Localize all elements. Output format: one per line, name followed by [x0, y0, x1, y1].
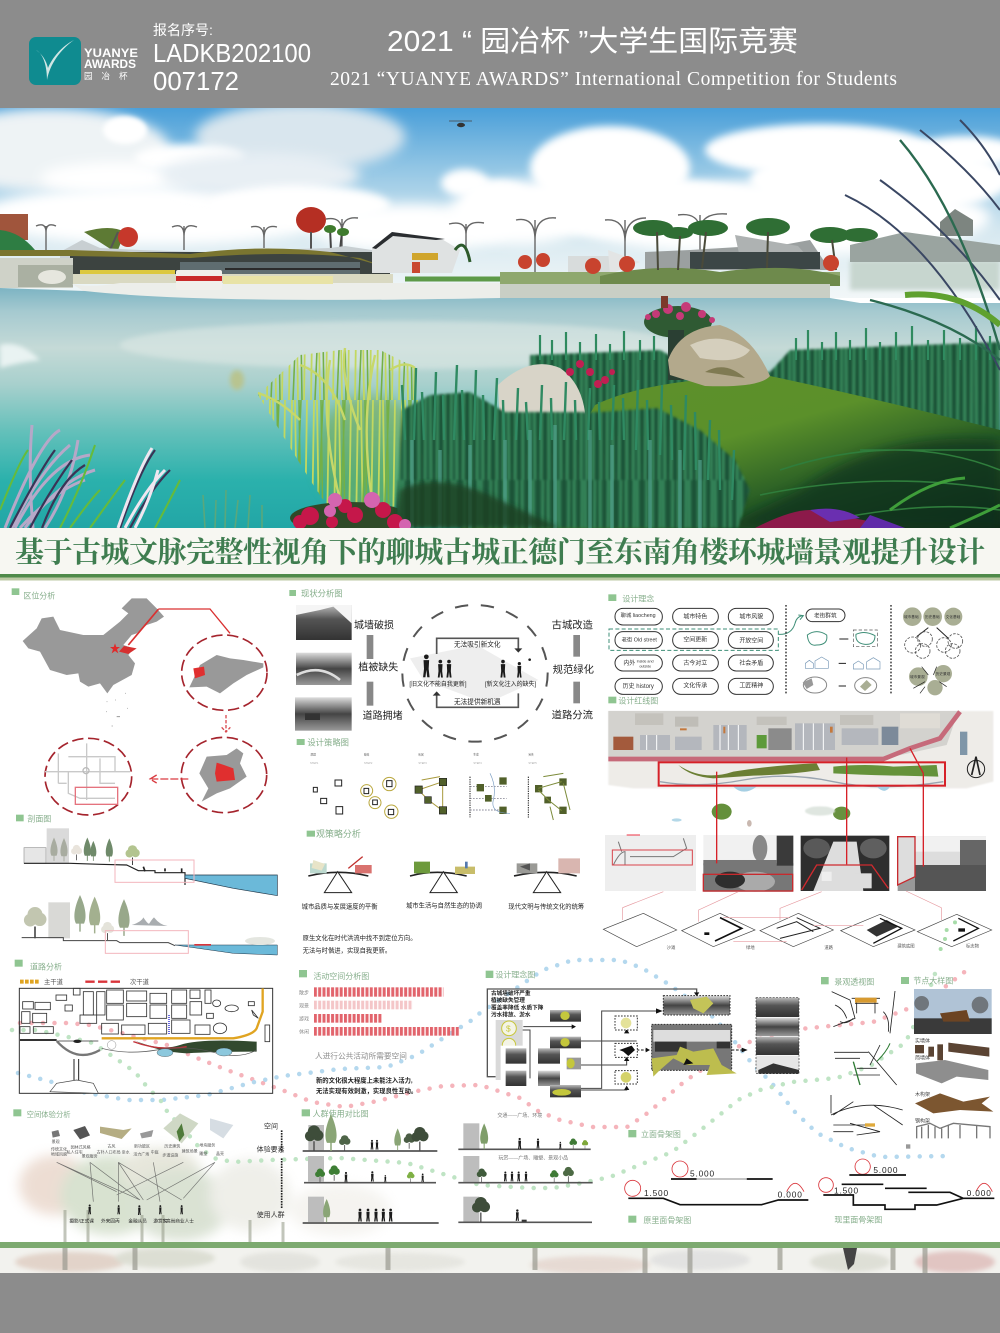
- heading: 景观透视图: [821, 976, 874, 986]
- site photos: [703, 835, 986, 892]
- heading: 空间体验分析: 空间体验分析: [27, 1110, 71, 1119]
- space experience network: 景观服务: [82, 1152, 98, 1158]
- logo: Yuanye Awards: [29, 37, 138, 85]
- space experience network: 游赏家: [153, 1218, 168, 1225]
- strategy steps: 生成: [473, 753, 479, 757]
- space experience network: 活力广场: [133, 1151, 149, 1157]
- dashed circle diagram: [402, 605, 548, 742]
- dotted dividers: [786, 605, 891, 695]
- layer captions: 沙滩: [667, 944, 676, 951]
- pill labels: 空间更新: [683, 636, 707, 644]
- strategy steps: 完善: [528, 753, 534, 757]
- concept pills: [615, 608, 773, 694]
- crowd comparison right column: [458, 1112, 593, 1222]
- left problem chain: 道路拥堵: [363, 709, 403, 722]
- design concept flow: 污水排放、淤水: [491, 1011, 531, 1019]
- heading: 原里面骨架图: 原里面骨架图: [643, 1216, 691, 1225]
- back reed band: [530, 342, 1000, 528]
- brick building and tree at left: [0, 214, 35, 252]
- space experience network: 景观: [52, 1138, 60, 1144]
- detail images: 木构架: [915, 1091, 930, 1098]
- space experience network: 园林式风格: [71, 1143, 91, 1149]
- footer band: [0, 1273, 1000, 1333]
- dashed circle diagram: [新文化注入的缺失]: [485, 680, 537, 688]
- back reed blades: [540, 326, 990, 360]
- helicopter: [449, 121, 472, 127]
- title band: 基于古城文脉完整性视角下的聊城古城正德门至东南角楼环城墙景观提升设计: [15, 535, 985, 569]
- layer captions: 道路: [824, 944, 834, 951]
- dotted blue path: [18, 960, 950, 1157]
- watermark tree trunks: [65, 1210, 283, 1242]
- pill labels: 城市风貌: [739, 613, 763, 621]
- competition title: 2021 “ 园冶杯 ”大学生国际竞赛: [387, 25, 798, 58]
- dotted green path: [12, 968, 937, 1188]
- left foreground grasses: [0, 425, 180, 528]
- isometric layers: [603, 913, 992, 947]
- space experience network: 步道设施: [162, 1152, 178, 1158]
- detail images: 钢构架: [915, 1118, 930, 1125]
- perspective sketches: [831, 991, 903, 1135]
- balance diagrams: 城市生活与自然生态的协调: [406, 900, 482, 909]
- activity bars: 游戏: [299, 1015, 309, 1022]
- purple flowers bottom right: [755, 509, 905, 528]
- balance diagrams: [302, 857, 584, 911]
- clouds: [0, 103, 1000, 256]
- trees behind the pavilion: [84, 207, 349, 250]
- design concept flow: 植被缺失管理: [491, 996, 525, 1004]
- heading: 设计理念: [608, 593, 654, 603]
- design concept flow: 覆盖率降低 水质下降: [491, 1003, 544, 1011]
- far left flowers bed base: [290, 502, 410, 534]
- space-element hierarchy labels: 空间: [264, 1121, 278, 1130]
- strategy steps: STEP3: [418, 761, 427, 765]
- road legend: 主干道: [44, 977, 64, 986]
- space experience network: 古风: [107, 1143, 115, 1149]
- strategy steps: STEP5: [528, 761, 537, 765]
- site photos: [295, 605, 352, 731]
- caption text: [303, 933, 417, 954]
- pink connector lines: [623, 891, 941, 942]
- pill labels: 开放空间: [739, 636, 763, 644]
- logo: Yuanye Awards: YUANYE: [84, 48, 138, 60]
- space experience network: 外来园丙: [101, 1218, 120, 1225]
- pill labels: Inside and: [637, 659, 654, 663]
- heading: 节点大样图: [901, 976, 953, 986]
- space experience network: 摄影/正式课: [69, 1218, 94, 1225]
- space experience network: 建筑场景: [182, 1147, 198, 1153]
- crowd comparison right column: 交通——广场、环境: [497, 1112, 542, 1119]
- panel: concept diagram, perspectives, skeleton sections: [458, 970, 994, 1225]
- heading: 节点大样图: 节点大样图: [913, 976, 953, 986]
- panel: location analysis: [12, 588, 277, 955]
- circle: Liaocheng: [181, 737, 267, 813]
- sky: [0, 108, 1000, 298]
- heading: 设计理念图: 设计理念图: [495, 970, 535, 980]
- space experience network: [51, 1113, 233, 1225]
- dotted pink path: [20, 970, 967, 1127]
- heading: 立面骨架图: [628, 1129, 681, 1139]
- space experience network: 亲水: [122, 1148, 130, 1154]
- road legend: 次干道: [130, 977, 150, 986]
- white house black roof: [372, 232, 470, 273]
- pill labels: 古今对立: [683, 659, 707, 667]
- palm trees and grey hall: [500, 209, 1000, 298]
- isometric layer contents: [704, 918, 978, 951]
- venn diagrams on right: 历史基础: [925, 614, 940, 619]
- pampas blades at right: [760, 120, 1000, 528]
- pill labels: [621, 611, 763, 690]
- strategy steps: [310, 753, 570, 820]
- pill labels: 内外: [623, 659, 635, 667]
- activity bars: 观景: [299, 1003, 309, 1009]
- strategy steps: STEP4: [473, 761, 482, 765]
- street lamps: [36, 214, 727, 275]
- competition title: 2021 “YUANYE AWARDS” International Competition for Students: [330, 69, 897, 90]
- space experience network: 新功能区: [134, 1142, 150, 1148]
- activity bars: [299, 987, 460, 1036]
- crowd comparison right column: 玩赏——广场、雕塑、景观小品: [498, 1155, 568, 1162]
- layer captions: 标志物: [966, 943, 980, 950]
- space experience network: 高尚商业人士: [166, 1218, 194, 1225]
- pill labels: 聊城 liaocheng: [621, 611, 656, 619]
- south china sea islands: [106, 693, 128, 726]
- circle: Shandong: [182, 635, 267, 710]
- dashed circle diagram: [旧文化不能自我更新]: [409, 680, 467, 688]
- pill labels: 社会矛盾: [739, 659, 763, 667]
- registration number: 007172: [153, 66, 239, 96]
- caption text: 无法与时偕进，实现自我更新。: [303, 945, 391, 954]
- original section skeleton: 1.500: [644, 1188, 669, 1198]
- left embankment wall: [0, 258, 73, 288]
- heading: 道路分析: 道路分析: [30, 962, 62, 972]
- arrow down: [222, 715, 230, 732]
- logo: Yuanye Awards: AWARDS: [84, 59, 136, 71]
- registration number: [153, 22, 311, 96]
- heading: 区位分析: [12, 588, 55, 600]
- space experience network: 历史建筑: [164, 1143, 180, 1149]
- layer captions: [667, 943, 980, 951]
- heading: 区位分析: 区位分析: [23, 590, 55, 600]
- dark reed base at left: [395, 482, 560, 528]
- islands: [672, 804, 850, 827]
- strategy steps: 破碎: [364, 753, 370, 757]
- crowd comparison left column: [303, 1114, 439, 1223]
- hero rendering: lakeside landscape: [0, 103, 1000, 534]
- balance diagrams: 现代文明与传统文化的统筹: [508, 902, 584, 911]
- venn diagrams on right: 历史景观: [936, 671, 951, 676]
- current section skeleton: 0.000: [967, 1188, 992, 1198]
- layer captions: 绿地: [746, 944, 755, 950]
- original section skeleton: 5.000: [690, 1168, 715, 1178]
- header band: [0, 0, 1000, 108]
- flowers bottom centre: [293, 492, 411, 531]
- activity bars: 散步: [299, 989, 309, 996]
- panel: design concept and red-line plan: [603, 593, 993, 951]
- space experience network: 金融从员: [128, 1218, 147, 1225]
- old street pill and process diagrams: [803, 609, 880, 694]
- road legend: [20, 977, 150, 986]
- dashed circle diagram: 无法提供新机遇: [454, 697, 501, 706]
- green roof pavilion: [0, 248, 397, 284]
- space experience network: 地域风貌: [51, 1151, 67, 1157]
- boulder main: [668, 325, 770, 386]
- design concept flow: 古城墙破坏严重: [491, 989, 531, 997]
- space experience network: 私人住宅: [67, 1148, 83, 1154]
- heading: 人群使用对比图: 人群使用对比图: [313, 1108, 369, 1118]
- small reeds in water: [203, 490, 262, 528]
- right strategy chain: [552, 619, 594, 722]
- foreground reeds: [395, 392, 750, 528]
- old street pill and process diagrams: 老街群筑: [814, 612, 837, 620]
- road plan: [19, 988, 273, 1093]
- pink flowers by boulder: [566, 360, 615, 388]
- space experience network: 地块服务: [199, 1142, 215, 1148]
- space-element hierarchy labels: 体验要素: [257, 1145, 285, 1154]
- pill labels: 老街 Old street: [622, 636, 657, 644]
- space-element hierarchy labels: [257, 1121, 285, 1219]
- watermark trees bottom-left: [19, 1148, 390, 1241]
- space experience network: 中庭: [151, 1148, 159, 1154]
- venn diagrams on right: 城市景观: [910, 674, 925, 679]
- title band: [0, 528, 1000, 580]
- activity bars: 休闲: [299, 1028, 309, 1035]
- current section skeleton: 5.000: [873, 1165, 898, 1175]
- venn diagrams on right: 文化基础: [946, 614, 961, 619]
- pill labels: 工匠精神: [739, 681, 763, 689]
- map of China: [23, 598, 164, 693]
- detail images: 简墙体: [915, 1054, 930, 1061]
- heading: 观策略分析: 观策略分析: [316, 828, 361, 839]
- original section skeleton: 0.000: [778, 1190, 803, 1200]
- panel: current-state analysis: [289, 589, 594, 954]
- foreground reed blades breaking the top edge: [402, 365, 734, 528]
- panel: road analysis, space experience, crowd use: [13, 960, 460, 1225]
- venn diagrams on right: 城市基础: [904, 614, 919, 619]
- balance diagrams: 城市品质与发展速度的平衡: [302, 901, 378, 910]
- dashed circle diagram: 无法吸引新文化: [454, 640, 501, 649]
- right strategy chain: 古城改造: [552, 619, 594, 632]
- space experience network: 传统文化: [51, 1146, 67, 1152]
- master plan strip: [608, 711, 993, 792]
- strategy steps: 肌理: [311, 753, 316, 757]
- space-element hierarchy labels: 使用人群: [257, 1210, 285, 1219]
- activity caption: 新的文化很大程度上未能注入活力,: [316, 1075, 413, 1084]
- competition title: [330, 25, 897, 90]
- ground band and tree reflection strip: [0, 1242, 1000, 1274]
- strategy steps: STEP2: [364, 761, 373, 765]
- caption: 现里面骨架图: 现里面骨架图: [834, 1215, 882, 1224]
- circle: old city: [45, 738, 132, 815]
- arrow left: [150, 775, 188, 783]
- yellow-green reeds: [258, 348, 425, 515]
- small locator map: [605, 835, 696, 891]
- grass hill: [460, 376, 1000, 528]
- logo: Yuanye Awards: 园冶杯: [84, 71, 137, 81]
- design concept flow: $: [506, 1023, 511, 1033]
- star and province highlight: [110, 609, 230, 654]
- heading: 现状分析图: 现状分析图: [301, 589, 343, 599]
- left problem chain: [354, 618, 403, 722]
- layer captions: 建筑底图: [897, 943, 915, 950]
- heading: 立面骨架图: 立面骨架图: [641, 1129, 681, 1139]
- heading: 设计红线图: 设计红线图: [618, 696, 658, 706]
- caption text: 原生文化在时代洪流中找不到定位方向。: [303, 933, 417, 942]
- red leader lines: [717, 748, 923, 867]
- left problem chain: 植被缺失: [358, 661, 398, 674]
- heading: 设计策略图: 设计策略图: [307, 738, 349, 748]
- detail images: [906, 989, 993, 1149]
- right strategy chain: 道路分流: [552, 709, 593, 722]
- detail images: 实墙体: [915, 1037, 930, 1044]
- activity caption: 无法实现有效刺激，实现良性互动。: [316, 1086, 417, 1095]
- strategy steps: STEP1: [310, 761, 319, 765]
- registration number: 报名序号:: [153, 22, 213, 38]
- space experience network: 雕塑: [199, 1150, 207, 1156]
- promenade and bus: [72, 270, 830, 300]
- heading: 设计理念: 设计理念: [622, 593, 654, 603]
- right strategy chain: 规范绿化: [553, 663, 594, 676]
- current section skeleton: [819, 1159, 994, 1209]
- pill labels: 城市特色: [683, 613, 707, 621]
- pill labels: outside: [639, 665, 651, 669]
- heading: 剖面图: 剖面图: [27, 813, 51, 823]
- flowering shrub with person: [644, 296, 715, 380]
- foam on left and reflections: [0, 321, 680, 390]
- dashed highlight with link arrow: [609, 615, 803, 650]
- registration number: LADKB202100: [153, 38, 311, 68]
- space experience network: 古朴人口布局: [97, 1148, 121, 1154]
- boulder behind reeds: [498, 364, 586, 430]
- space experience network: 晶亮: [216, 1150, 224, 1156]
- left problem chain: 城墙破损: [354, 618, 394, 631]
- activity caption: 人进行公共活动所需要空间: [315, 1050, 407, 1060]
- heading: 景观透视图: 景观透视图: [834, 976, 874, 986]
- design concept flow: [487, 989, 799, 1097]
- heading: 活动空间分析图: [299, 970, 369, 981]
- pill labels: 文化传承: [683, 681, 707, 689]
- heading: 活动空间分析图: 活动空间分析图: [313, 971, 369, 981]
- heading: 道路分析: [15, 960, 62, 972]
- pill labels: 历史 history: [623, 682, 654, 690]
- grey roofs distant: [60, 240, 372, 262]
- section drawing lower: [22, 895, 277, 955]
- lake water: [0, 288, 1000, 528]
- activity caption: [315, 1050, 417, 1095]
- heading: 剖面图: [16, 813, 51, 823]
- venn diagrams on right: [903, 607, 963, 695]
- section drawing upper: [24, 828, 277, 896]
- strategy steps: 拓展: [418, 753, 424, 757]
- current section skeleton: 1.500: [834, 1186, 859, 1196]
- original section skeleton: [625, 1161, 808, 1205]
